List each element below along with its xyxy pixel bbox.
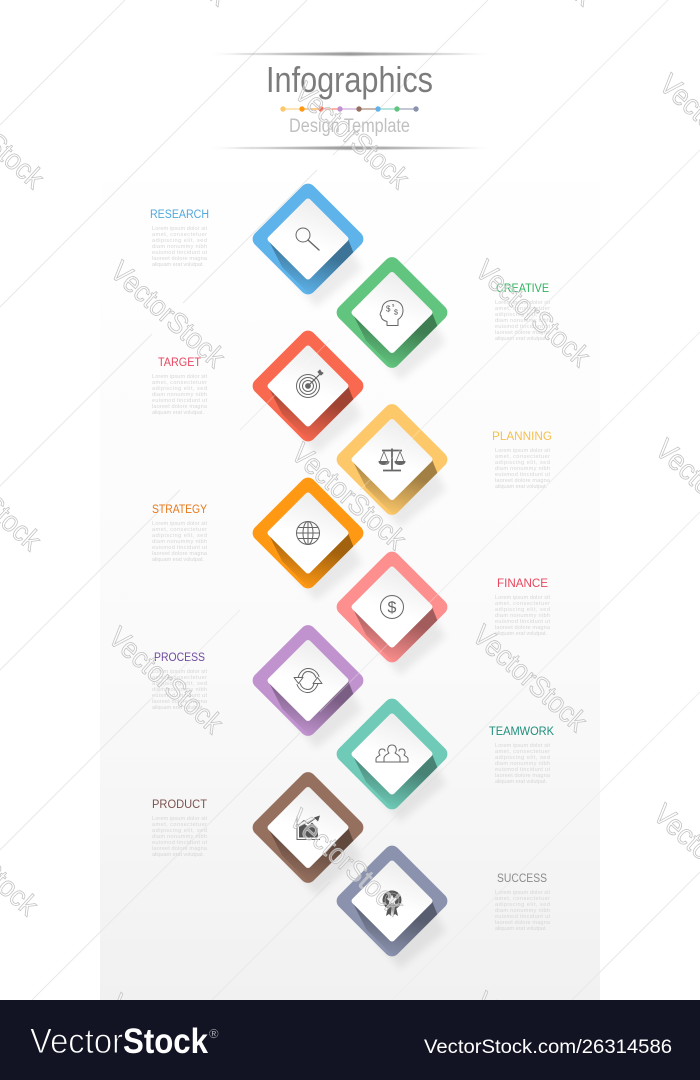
heading: research: RESEARCH: [150, 209, 209, 221]
body: target: [152, 374, 208, 416]
icon: balance scales: [379, 448, 405, 470]
step 6 diamond: finance: [333, 548, 451, 675]
body: target: adipiscing elit, sed: [152, 386, 207, 392]
body: success: aliquam erat volutpat.: [495, 926, 547, 932]
icon: circular arrows: [294, 668, 322, 692]
icon: head with dollar signs: $: [392, 302, 395, 308]
label: planning: [492, 431, 552, 490]
body: teamwork: Lorem ipsum dolor sit: [495, 743, 550, 749]
label: strategy: [152, 504, 208, 563]
body: strategy: adipiscing elit, sed: [152, 533, 207, 539]
body: success: adipiscing elit, sed: [495, 902, 550, 908]
label: target: [152, 357, 208, 416]
footer logo: ®: [209, 1026, 219, 1041]
label: success: [495, 873, 551, 932]
icon: award ribbon: [382, 890, 402, 916]
body: planning: laoreet dolore magna: [495, 478, 551, 484]
body: success: laoreet dolore magna: [495, 920, 551, 926]
label: product: [152, 799, 208, 858]
label: research: [150, 209, 209, 268]
body: finance: diam nonummy nibh: [495, 613, 550, 619]
step 9 diamond: product: [249, 769, 367, 896]
body: creative: diam nonummy nibh: [495, 318, 550, 324]
body: finance: Lorem ipsum dolor sit: [495, 595, 550, 601]
body: teamwork: aliquam erat volutpat.: [495, 779, 547, 785]
step 5 diamond: strategy: [249, 474, 367, 601]
body: finance: amet, consectetuer: [495, 601, 550, 607]
body: process: euismod tincidunt ut: [152, 693, 207, 699]
body: creative: euismod tincidunt ut: [495, 324, 550, 330]
body: creative: [495, 300, 551, 342]
body: planning: Lorem ipsum dolor sit: [495, 448, 550, 454]
heading: finance: FINANCE: [497, 578, 548, 590]
body: strategy: amet, consectetuer: [152, 527, 207, 533]
heading: creative: CREATIVE: [496, 283, 549, 295]
body: product: diam nonummy nibh: [152, 834, 207, 840]
body: creative: adipiscing elit, sed: [495, 312, 550, 318]
body: research: amet, consectetuer: [152, 232, 207, 238]
body: strategy: laoreet dolore magna: [152, 551, 208, 557]
watermarks: VectorStock: [285, 437, 412, 556]
body: product: adipiscing elit, sed: [152, 828, 207, 834]
body: target: amet, consectetuer: [152, 380, 207, 386]
body: product: aliquam erat volutpat.: [152, 852, 204, 858]
icon: group of people: [376, 745, 408, 762]
step 1 diamond: research: [249, 180, 367, 307]
body: finance: euismod tincidunt ut: [495, 619, 550, 625]
watermarks: VectorStock: [469, 254, 596, 373]
watermarks: VectorStock: [466, 619, 593, 738]
colored dots timeline: [280, 106, 419, 112]
body: product: amet, consectetuer: [152, 822, 207, 828]
step 4 diamond: planning: [333, 401, 451, 528]
heading: teamwork: TEAMWORK: [489, 726, 554, 738]
icon: head with dollar signs: $: [386, 304, 391, 314]
body: research: euismod tincidunt ut: [152, 250, 207, 256]
body: research: aliquam erat volutpat.: [152, 262, 204, 268]
body: creative: aliquam erat volutpat.: [495, 336, 547, 342]
body: finance: laoreet dolore magna: [495, 625, 551, 631]
panel: gradient backdrop: [100, 150, 600, 1000]
body: success: Lorem ipsum dolor sit: [495, 890, 550, 896]
icon: globe: [296, 522, 320, 544]
heading: target: TARGET: [158, 357, 201, 369]
step 7 diamond: process: [249, 622, 367, 748]
title heading: Infographics: [266, 59, 433, 100]
body: product: euismod tincidunt ut: [152, 840, 207, 846]
body: teamwork: laoreet dolore magna: [495, 773, 551, 779]
body: planning: adipiscing elit, sed: [495, 460, 550, 466]
body: strategy: [152, 521, 208, 563]
body: process: laoreet dolore magna: [152, 699, 208, 705]
body: planning: euismod tincidunt ut: [495, 472, 550, 478]
body: target: aliquam erat volutpat.: [152, 410, 204, 416]
body: teamwork: euismod tincidunt ut: [495, 767, 550, 773]
body: strategy: aliquam erat volutpat.: [152, 557, 204, 563]
body: planning: diam nonummy nibh: [495, 466, 550, 472]
body: finance: [495, 595, 551, 637]
step 10 diamond: success: [333, 842, 451, 969]
heading: strategy: STRATEGY: [152, 504, 207, 516]
footer logo: VectorStock: [30, 1022, 218, 1061]
body: teamwork: amet, consectetuer: [495, 749, 550, 755]
step 3 diamond: target: [249, 327, 367, 454]
watermarks: VectorStock: [288, 76, 415, 195]
label: creative: [495, 283, 551, 342]
body: research: laoreet dolore magna: [152, 256, 208, 262]
heading: process: PROCESS: [154, 652, 205, 664]
body: planning: amet, consectetuer: [495, 454, 550, 460]
label: teamwork: [489, 726, 554, 785]
icon: target with arrow: [296, 370, 323, 398]
label: process: [152, 652, 208, 711]
body: finance: aliquam erat volutpat.: [495, 631, 547, 637]
body: creative: Lorem ipsum dolor sit: [495, 300, 550, 306]
body: process: Lorem ipsum dolor sit: [152, 669, 207, 675]
body: research: [152, 226, 208, 268]
body: strategy: euismod tincidunt ut: [152, 545, 207, 551]
body: product: [152, 816, 208, 858]
body: research: Lorem ipsum dolor sit: [152, 226, 207, 232]
body: research: diam nonummy nibh: [152, 244, 207, 250]
body: process: diam nonummy nibh: [152, 687, 207, 693]
heading: planning: PLANNING: [492, 431, 552, 443]
body: target: euismod tincidunt ut: [152, 398, 207, 404]
icon: head with dollar signs: $: [394, 310, 398, 316]
body: product: Lorem ipsum dolor sit: [152, 816, 207, 822]
body: planning: aliquam erat volutpat.: [495, 484, 547, 490]
body: product: laoreet dolore magna: [152, 846, 208, 852]
watermarks: VectorStock: [102, 621, 229, 740]
body: finance: adipiscing elit, sed: [495, 607, 550, 613]
footer image id: VectorStock.com/26314586: [424, 1037, 672, 1058]
body: planning: [495, 448, 551, 490]
footer bar: [0, 1000, 700, 1080]
body: creative: laoreet dolore magna: [495, 330, 551, 336]
body: research: adipiscing elit, sed: [152, 238, 207, 244]
body: strategy: Lorem ipsum dolor sit: [152, 521, 207, 527]
body: success: [495, 890, 551, 932]
step 2 diamond: creative: [333, 254, 451, 380]
body: teamwork: adipiscing elit, sed: [495, 755, 550, 761]
body: process: [152, 669, 208, 711]
icon: dollar coin: $: [388, 600, 397, 616]
body: strategy: diam nonummy nibh: [152, 539, 207, 545]
step 8 diamond: teamwork: [333, 695, 451, 822]
icon: growth chart: [297, 816, 320, 840]
heading: success: SUCCESS: [497, 873, 547, 885]
watermarks: VectorStock: [283, 803, 410, 922]
body: target: diam nonummy nibh: [152, 392, 207, 398]
title block: [208, 52, 492, 150]
body: teamwork: diam nonummy nibh: [495, 761, 550, 767]
body: process: aliquam erat volutpat.: [152, 705, 204, 711]
subtitle: Design Template: [289, 116, 410, 137]
body: success: euismod tincidunt ut: [495, 914, 550, 920]
icon: head with dollar signs: [380, 300, 403, 326]
body: target: laoreet dolore magna: [152, 404, 208, 410]
bottom rule: [208, 146, 492, 150]
watermarks: VectorStock: [104, 255, 231, 374]
body: success: diam nonummy nibh: [495, 908, 550, 914]
body: process: amet, consectetuer: [152, 675, 207, 681]
body: success: amet, consectetuer: [495, 896, 550, 902]
body: teamwork: [495, 743, 551, 785]
top rule: [208, 52, 492, 56]
body: process: adipiscing elit, sed: [152, 681, 207, 687]
label: finance: [495, 578, 551, 637]
body: target: Lorem ipsum dolor sit: [152, 374, 207, 380]
icon: magnifier: [296, 228, 319, 250]
body: creative: amet, consectetuer: [495, 306, 550, 312]
heading: product: PRODUCT: [152, 799, 207, 811]
